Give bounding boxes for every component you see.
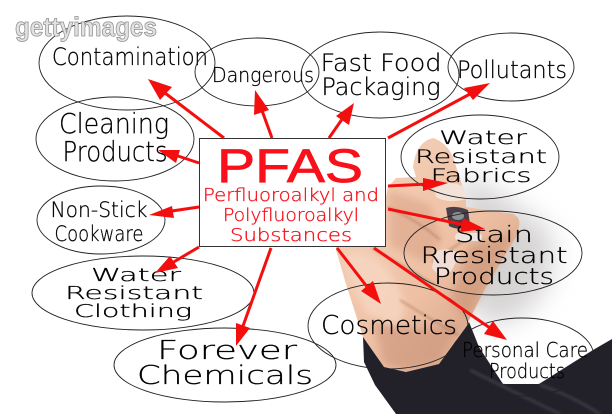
shaded areas between fingers <box>388 190 442 262</box>
middle nail <box>432 249 460 276</box>
arrow to Non-Stick Cookware <box>149 206 199 218</box>
illustration: hand holding marker <box>336 138 519 372</box>
palm highlight <box>345 253 404 325</box>
finger creases <box>372 207 470 335</box>
arrow to Contamination <box>148 79 224 138</box>
marker pen <box>446 207 470 229</box>
oval: Water Resistant Clothing <box>32 256 254 330</box>
oval: Water Resistant Fabrics: Water <box>439 127 527 149</box>
oval: Forever Chemicals: Forever <box>157 336 297 366</box>
oval: Cosmetics: Cosmetics <box>321 311 457 341</box>
arrow to Personal Care Products <box>374 248 507 340</box>
oval: Water Resistant Fabrics: Resistant <box>415 146 547 168</box>
arrow to Cosmetics <box>337 248 381 304</box>
lower nail <box>455 233 482 241</box>
watermark: gettyimages: gettyimages <box>15 12 157 42</box>
arrow to Water Resistant Clothing <box>155 247 199 273</box>
thumb nail <box>433 183 467 201</box>
central box: PFAS <box>200 138 386 246</box>
oval: Stain Resistant Products <box>404 211 582 295</box>
oval: Water Resistant Clothing: Clothing <box>74 301 192 322</box>
suit sleeve <box>363 322 612 414</box>
oval: Water Resistant Fabrics <box>401 115 559 199</box>
arrow to Dangerous <box>254 90 272 138</box>
oval: Personal Care Products: Personal Care <box>462 338 588 362</box>
heading: PFAS: PFAS <box>217 139 363 192</box>
shaded wrist <box>372 320 462 370</box>
arrow to Pollutants <box>388 83 490 138</box>
oval: Water Resistant Clothing: Resistant <box>65 283 203 304</box>
arrow to Water Resistant Fabrics <box>388 178 448 191</box>
oval: Personal Care Products: Products <box>489 359 565 383</box>
oval: Fast Food Packaging: Fast Food <box>320 49 442 77</box>
oval: Cleaning Products: Products <box>62 135 168 168</box>
oval: Contamination: Contamination <box>52 43 208 71</box>
oval: Dangerous: Dangerous <box>212 63 314 87</box>
oval: Stain Resistant Products: Stain <box>455 223 533 248</box>
oval: Pollutants <box>448 33 574 101</box>
hand <box>336 138 519 372</box>
subtitle: Perfluoroalkyl and Polyfluoroalkyl Substances <box>203 185 379 246</box>
marker tip <box>452 212 464 220</box>
arrow to Stain Resistant Products <box>388 209 485 232</box>
subtitle: Perfluoroalkyl and Polyfluoroalkyl Substances: Polyfluoroalkyl <box>223 205 359 226</box>
oval: Pollutants: Pollutants <box>457 56 567 84</box>
oval: Non-Stick Cookware: Cookware <box>54 222 144 246</box>
subtitle: Perfluoroalkyl and Polyfluoroalkyl Substances: Perfluoroalkyl and <box>203 185 379 206</box>
arrow to Cleaning Products <box>158 150 199 163</box>
oval: Cleaning Products <box>36 97 194 181</box>
arrow to Forever Chemicals <box>236 248 271 346</box>
oval: Fast Food Packaging <box>301 32 459 118</box>
oval: Stain Resistant Products: Products <box>434 265 554 290</box>
oval: Forever Chemicals: Chemicals <box>137 361 313 391</box>
oval: Stain Resistant Products: Rresistant <box>420 244 568 269</box>
oval: Forever Chemicals <box>114 328 336 402</box>
oval: Fast Food Packaging: Packaging <box>322 73 440 101</box>
oval: Personal Care Products <box>450 318 594 396</box>
oval: Water Resistant Clothing: Water <box>91 265 182 286</box>
oval: Contamination <box>39 16 215 110</box>
oval: Non-Stick Cookware: Non-Stick <box>50 198 148 222</box>
oval: Cosmetics <box>308 283 468 369</box>
oval: Non-Stick Cookware <box>37 186 165 254</box>
oval: Cleaning Products: Cleaning <box>59 107 169 140</box>
oval: Dangerous <box>195 38 319 106</box>
hand shadow <box>460 172 552 325</box>
right hand shading <box>450 232 515 320</box>
oval: Water Resistant Fabrics: Fabrics <box>430 165 532 187</box>
arrow to Fast Food Packaging <box>329 103 354 138</box>
subtitle: Perfluoroalkyl and Polyfluoroalkyl Substances: Substances <box>230 225 352 246</box>
sleeve highlight <box>470 370 600 414</box>
